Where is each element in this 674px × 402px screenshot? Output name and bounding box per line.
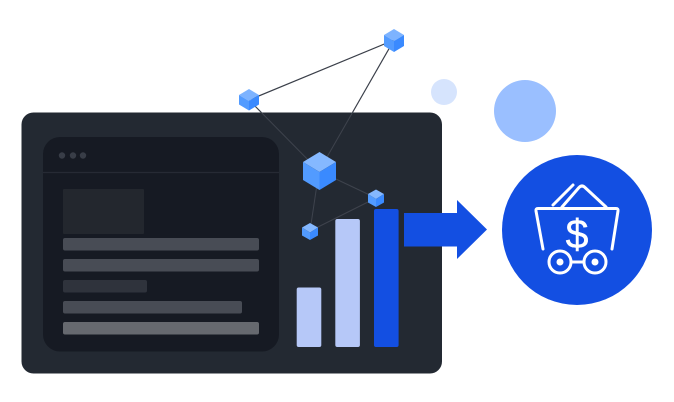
icon: cube left	[239, 89, 259, 110]
icon: small cube lower	[302, 223, 318, 240]
icon: small cube right	[368, 190, 384, 207]
large decorative bubble	[494, 80, 556, 142]
icon: money cart badge	[502, 155, 652, 305]
wheel hubs	[556, 258, 564, 266]
text line placeholders	[63, 238, 259, 334]
arrow	[404, 200, 487, 259]
icon: large cube	[303, 152, 336, 190]
panel: browser window	[43, 137, 279, 352]
panel: dark dashboard	[22, 112, 442, 374]
window control dots	[59, 152, 86, 159]
image placeholder	[63, 189, 144, 234]
small decorative bubble	[431, 79, 457, 105]
network connections	[249, 40, 394, 231]
icon: cube top right	[384, 29, 404, 52]
dollar sign: $	[566, 211, 589, 257]
cart outline	[536, 185, 618, 273]
bar chart	[297, 209, 399, 347]
